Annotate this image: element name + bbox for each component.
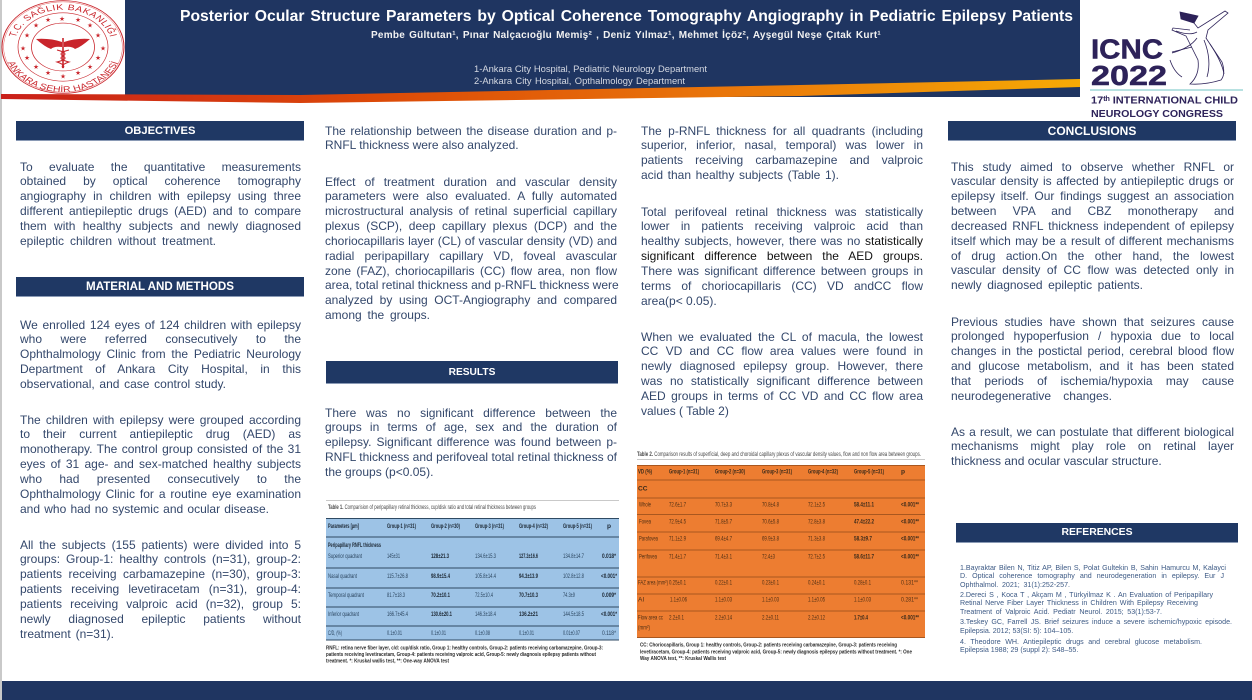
text: perifoveal thickness: area(p< 0.05). [641,294,717,308]
text: previous studies: neurodegenerative changes. [951,389,1112,403]
table 1: peripapillary thickness: C/D, (%) [328,630,342,637]
logo: hospital seal: ★ [45,16,51,24]
text: objectives body: angiography in children with epilepsy using three [20,189,301,203]
text: treatment duration: plexus (SCP), deep capillary plexus (DCP) and the [325,219,617,233]
table 1: peripapillary thickness: 134.6±15.3 [475,553,496,560]
text: reference 3: Epilepsia. 2012; 53(SI: 5): 104–105. [960,626,1073,634]
text: result statement [951,424,1234,468]
table 1: peripapillary thickness: 70.7±10.3 [519,592,538,599]
table 2: vascular density: 2.2±0.1 [669,614,684,622]
table 1: peripapillary thickness: 0.01±0.07 [563,630,580,637]
table 2: vascular density: 2.2±0.12 [808,614,825,622]
table 2: vascular density: 0.131** [901,580,918,586]
text: conclusions study aim: decreased RNFL thickness independent of epilepsy [951,219,1234,233]
logo: hospital seal: ★ [33,22,39,30]
table 2: vascular density: 0.28±0.1 [854,580,871,586]
table 2: vascular density: 71.4±3.1 [715,554,732,560]
text: reference 4: 4. Theodore WH. Antiepileptic drugs and cerebral glucose metabolism. [960,638,1202,646]
table 2: vascular density: 72.4±3 [762,554,775,560]
text: reference 1 [960,564,1226,588]
table 2: vascular density: 58.6±11.7 [854,554,874,560]
text: conclusions study aim: This study aimed to observe whether RNFL or [951,160,1234,174]
text: result statement: mechanisms might play role on retinal layer [951,439,1234,453]
table 2: vascular density: <0.001** [901,518,919,526]
logo: hospital seal: ★ [59,15,65,23]
text: macula findings: CC VD and CC flow area values were found in [641,344,923,358]
text: results intro: epilepsy. Significant difference was found between p- [325,435,617,449]
logo: hospital seal: ★ [20,44,26,52]
table 2: vascular density: 72.8±3.8 [808,518,825,526]
text: results intro: groups in terms of age, sex and the duration of [325,420,617,434]
table 2: vascular density: (mm²) [638,624,650,632]
table 2: vascular density: p [901,468,905,476]
title: Posterior Ocular Structure Parameters by Optical Coherence Tomography Angiography in Pediatric Epilepsy Patients [180,8,1073,25]
table 1: peripapillary thickness: Peripapillary RNFL thickness [328,542,381,549]
text: p-RNFL quadrants [641,124,923,182]
text: reference 2: 2.Dereci S , Koca T , Akçam M , Türkyilmaz K . An Evaluation of Peripapillary [960,590,1213,598]
table 1: peripapillary thickness: 105.8±14.4 [475,573,496,580]
table 2: vascular density: Group-2 (n=30) [715,468,745,476]
text: macula findings: When we evaluated the CL of macula, the lowest [641,330,923,344]
table 1: peripapillary thickness: 136.2±21 [519,611,538,618]
table 1: peripapillary thickness: 72.5±10.4 [475,592,493,599]
table 2: vascular density: <0.001** [901,502,919,508]
text: treatment duration: radial peripapillary capillary VD, foveal avascular [325,249,617,263]
text: grouping: The children with epilepsy were grouped according [20,412,301,426]
table 2: vascular density: 72.1±2.5 [808,502,825,508]
logo: hospital seal: ★ [87,63,93,71]
table 1: peripapillary thickness: 102.8±12.8 [563,573,584,580]
table 2: vascular density: Group-4 (n=32) [808,468,838,476]
text: conclusions study aim [951,160,1234,292]
table 1: peripapillary thickness: 134.8±14.7 [563,553,584,560]
header band [125,0,1080,97]
table 2: vascular density: 58.4±11.1 [854,502,874,508]
text: macula findings: was no statistically significant difference between [641,374,923,388]
text: treatment duration: among the groups. [325,308,430,322]
text: five groups: groups: Group-1: healthy controls (n=31), group-2: [20,552,301,566]
table 2: vascular density: 70.6±5.8 [762,518,779,526]
table 2: vascular density: Flow area cc [638,614,663,622]
text: reference 1: 1.Bayraktar Bilen N, Titiz AP, Bilen S, Polat Gultekin B, Sahin Hamurcu M, Kalayci [960,564,1226,572]
text: previous studies: and glucose metabolism, and it has been stated [951,359,1234,373]
text: results intro: RNFL thickness and perifoveal total retinal thickness of [325,450,617,464]
table 2: vascular density: 0.24±0.1 [808,580,825,586]
text: five groups: All the subjects (155 patients) were divided into 5 [20,538,301,552]
text: conclusions study aim: newly diagnosed epileptic patients. [951,278,1143,292]
table 2: vascular density: 0.22±0.1 [715,580,732,586]
text: previous studies: Previous studies have shown that seizures cause [951,314,1234,328]
panel: objectives [16,121,304,248]
text: reference 4 [960,638,1202,654]
footer band [2,681,1252,700]
table 1: peripapillary thickness: Superior quadrant [328,553,362,560]
table 1: peripapillary thickness: Parameters [µm] [328,523,359,530]
table 2: vascular density: CC [638,486,648,492]
table 2: vascular density: Whole [639,502,651,508]
text: grouping: monotherapy. The control group consisted of the 31 [20,442,301,456]
text: conclusions study aim: epilepsy itself. Our findings suggest an association [951,189,1234,203]
text: conclusions study aim: between VPA and CBZ monotherapy and [951,204,1234,218]
logo: hospital seal: ★ [24,32,30,40]
logo: ICNC 2022 congress: 17ᵗʰ INTERNATIONAL CHILD [1091,94,1239,106]
text: perifoveal thickness: terms of choriocapillaris (CC) VD andCC flow [641,279,923,293]
text: conclusions study aim: vascular density is affected by antiepileptic drugs or [951,174,1234,188]
table 2: vascular density: Group-1 (n=31) [669,468,699,476]
text: macula findings: values ( Table 2) [641,404,729,418]
text: reference 3: 3.Teskey GC, Farrell JS. Brief seizures induce a severe ischemic/hypoxic episode. [960,618,1232,626]
table 1: peripapillary thickness: 0.1±0.01 [519,630,534,637]
text: treatment duration: parameters were also evaluated. A fully automated [325,189,617,203]
text: objectives body: them with healthy subjects and newly diagnosed [20,219,301,233]
table 2: vascular density: 1.1±0.03 [762,596,779,604]
affiliations: 2-Ankara City Hospital, Opthalmology Department [474,75,685,86]
table 1: peripapillary thickness: 166.7±45.4 [387,611,408,618]
text: conclusions study aim: vascular density of CC flow was detected only in [951,263,1234,277]
left edge strip [0,0,2,700]
table 1: peripapillary thickness: Nasal quadrant [328,573,357,580]
table 1: peripapillary thickness: 127.3±16.6 [519,553,538,560]
table 1: peripapillary thickness: p [607,523,611,530]
heading: material and methods: MATERIAL AND METHODS [86,280,234,293]
heading: results: RESULTS [449,366,495,378]
text: enrolment: Ophthalmology Clinic from the Pediatric Neurology [20,347,301,361]
text: grouping: Ophthalmology Clinic for a routine eye examination [20,487,301,501]
text: objectives body: different antiepileptic drugs (AED) and to compare [20,204,301,218]
text: perifoveal thickness: healthy subjects, however, there was no statistically [641,234,923,248]
table 1: peripapillary thickness: 144.5±18.5 [563,611,584,618]
text: grouping: to their current antiepileptic drug (AED) as [20,427,301,441]
table 1: peripapillary thickness: 0.1±0.01 [431,630,446,637]
logo: hospital seal: ★ [24,54,30,62]
table 2: vascular density: 2.2±0.11 [762,614,779,622]
table 1: peripapillary thickness: Group-2 (n=30) [431,523,460,530]
heading: objectives: OBJECTIVES [125,124,195,136]
text: perifoveal thickness: significant difference between the AED groups. [641,249,923,263]
table 1: peripapillary thickness: 130.6±20.1 [431,611,452,618]
text: disease duration: RNFL thickness were also analyzed. [325,138,519,152]
text: enrolment: observational, and case control study. [20,377,226,391]
table 1: peripapillary thickness: 0.1±0.01 [387,630,402,637]
text: macula findings [641,330,924,418]
table 1: peripapillary thickness: 0.1±0.08 [475,630,490,637]
table 1: peripapillary thickness: <0.001* [601,611,617,618]
table 2: vascular density: 72.7±2.5 [808,554,825,560]
table 2: vascular density: 72.9±4.5 [669,518,686,526]
table 1: peripapillary thickness: Inferior quadrant [328,611,359,618]
text: treatment duration: choriocapillaris layer (CL) of vascular density (VD) and [325,234,617,248]
table 2: vascular density: 58.3±9.7 [854,536,872,542]
logo: ICNC 2022 congress: NEUROLOGY CONGRESS [1091,109,1223,120]
logo: ICNC 2022 congress: ICNC [1091,34,1163,64]
table 1: peripapillary thickness: 70.2±10.1 [431,592,450,599]
logo: hospital seal: ★ [45,69,51,77]
logo: ICNC 2022 congress: 2022 [1091,60,1167,91]
table 1: peripapillary thickness: Group-4 (n=32) [519,523,548,530]
table 2: vascular density: Parafovea [639,536,658,542]
table 2: vascular density: 1.1±0.06 [670,596,687,604]
heading: conclusions: CONCLUSIONS [1048,124,1136,138]
logo: hospital seal: ★ [75,16,81,24]
table 2: vascular density: Way ANOVA test, **: Kruskal Wallis test [640,656,726,662]
text: reference 2: Retinal Nerve Fiber Layer Thickness in Children With Epilepsy Receiving [960,599,1198,607]
logo: hospital seal: ★ [100,44,106,52]
table 1: peripapillary thickness: 98.9±15.4 [431,573,450,580]
affiliations: 1-Ankara City Hospital, Pediatric Neurology Department [474,63,707,74]
table 1: peripapillary thickness: 0.009* [602,592,616,599]
table 1: peripapillary thickness: 0.018* [602,553,616,560]
table 2: vascular density: <0.001** [901,554,919,560]
text: enrolment: We enrolled 124 eyes of 124 children with epilepsy [20,318,301,332]
text: conclusions study aim: of drug action.On the other hand, the lowest [951,249,1234,263]
table 2: vascular density: 2.2±0.14 [715,614,732,622]
table 2: vascular density: FAZ area (mm²) [638,580,668,586]
text: objectives body: epileptic children without treatment. [20,234,216,248]
table 2: vascular density: 69.9±3.8 [762,536,779,542]
text: perifoveal thickness [641,204,923,308]
table 2: vascular density: <0.001** [901,614,919,622]
text: five groups: patients receiving valproic acid (n=32), group 5: [20,597,301,611]
table 1: peripapillary thickness: 145±31 [387,553,400,560]
text: perifoveal thickness: Total perifoveal retinal thickness was statistically [641,204,923,218]
table 2: vascular density: 1.1±0.03 [854,596,871,604]
table 1: peripapillary thickness: 94.3±13.9 [519,573,538,580]
table 1: peripapillary thickness: Group-5 (n=31) [563,523,592,530]
text: treatment duration: Effect of treatment duration and vascular density [325,174,617,188]
panel: material and methods [16,277,304,641]
text: previous studies [951,314,1234,403]
table 1: peripapillary thickness: 115.7±26.8 [387,573,408,580]
table 1: peripapillary thickness: 128±21.3 [431,553,449,560]
table 2: vascular density: 1.1±0.03 [715,596,732,604]
logo: hospital seal: T.C. SAĞLIK BAKANLIĞI [8,4,117,36]
text: conclusions study aim: itself which may be a result of different mechanisms [951,234,1234,248]
table 2: vascular density: VD (%) [638,468,652,476]
text: objectives body [20,160,301,248]
logo: hospital seal [2,0,124,94]
text: result statement: thickness and ocular vascular structure. [951,454,1162,468]
table 1: peripapillary thickness: Table 1. Comparision of peripapillary retinal thickness, cup/disk ratio and total retinal thickness between groups [328,504,536,511]
heading: material and methods [16,277,304,297]
text: reference 2 [960,590,1213,616]
table 2: vascular density: 0.281** [901,596,918,604]
table 1: peripapillary thickness: 74.3±9 [563,592,575,599]
text: grouping: eyes of 31 age- and sex-matched healthy subjects [20,457,301,471]
table 2: vascular density: 71.3±3.8 [808,536,825,542]
text: treatment duration: microstructural analysis of retinal superficial capillary [325,204,617,218]
table 2: vascular density: Group-3 (n=31) [762,468,792,476]
text: treatment duration [325,174,619,322]
text: treatment duration: zone (FAZ), choriocapillaris (CC) flow area, non flow [325,264,617,278]
panel: conclusions [948,121,1236,468]
text: reference 4: Epilepsia 1988; 29 (suppl 2): S48–55. [960,646,1078,654]
table 2: vascular density: Perifovea [639,554,657,560]
text: enrolment [20,318,301,391]
table 1: peripapillary thickness [326,500,619,664]
text: treatment duration: area, total retinal thickness and p-RNFL thickness were [325,278,619,292]
text: results intro [325,406,617,479]
table 2: vascular density [637,451,925,662]
text: perifoveal thickness: There was significant difference between groups in [641,264,923,278]
text: disease duration [325,124,617,152]
text: previous studies: changes in the postictal period, cerebral blood flow [951,344,1234,358]
heading: conclusions [948,121,1236,141]
heading: objectives [16,121,304,141]
table 2: vascular density: 71.8±5.7 [715,518,732,526]
text: result statement: As a result, we can postulate that different biological [951,424,1234,438]
table 2: vascular density: 70.8±4.8 [762,502,779,508]
text: grouping: who had presented consecutively to the [20,472,301,486]
text: five groups [20,538,301,641]
table 1: peripapillary thickness: 0.118* [602,630,616,637]
logo: hospital seal: ANKARA ŞEHİR HASTANESİ [8,60,118,92]
table 2: vascular density: AI [638,596,644,604]
table 1: peripapillary thickness: Temporal quadrant [328,592,364,599]
table 1: peripapillary thickness: treatment. *: Kruskal wallis test, **: One-way ANOVA test [326,658,449,664]
text: five groups: treatment (n=31). [20,627,114,641]
text: perifoveal thickness: lower in patients receiving valproic acid than [641,219,923,233]
table 1: peripapillary thickness: 81.7±18.3 [387,592,405,599]
table 1: peripapillary thickness: Group-3 (n=31) [475,523,504,530]
affiliations [474,63,707,86]
text: p-RNFL quadrants: acid than healthy subjects (Table 1). [641,168,839,182]
text: grouping [20,412,301,516]
table 1: peripapillary thickness: Group-1 (n=31) [387,523,416,530]
heading: results [326,361,618,384]
logo: hospital seal: ★ [95,32,101,40]
table 2: vascular density: <0.001** [901,536,919,542]
text: macula findings: AED groups in terms of CC VD and CC flow area [641,389,923,403]
text: results intro: the groups (p<0.05). [325,465,433,479]
logo: hospital seal: ★ [87,22,93,30]
table 1: peripapillary thickness: <0.001* [601,573,617,580]
logo: hospital seal: ★ [95,54,101,62]
table 2: vascular density: 71.4±1.7 [669,554,686,560]
text: previous studies: prolonged hypoperfusion / hypoxia due to local [951,329,1234,343]
table 2: vascular density: 47.4±22.2 [854,518,874,526]
heading: references: REFERENCES [1061,527,1132,538]
text: previous studies: that periods of ischemia/hypoxia may cause [951,374,1234,388]
header swoosh [1,79,1080,103]
table 2: vascular density: Fovea [639,518,651,526]
text: objectives body: obtained by optical coherence tomography [20,174,301,188]
text: enrolment: Department of Ankara City Hospital, in this [20,362,301,376]
table 2: vascular density: 1.7±0.4 [854,614,868,622]
text: five groups: patients receiving levetiracetam (n=31), group-4: [20,582,301,596]
heading: references [956,523,1238,543]
table 2: vascular density: 71.1±2.9 [669,536,686,542]
table 2: vascular density: 0.23±0.1 [762,580,779,586]
text: reference 1: D. Optical coherence tomography and neurodegeneration in epilepsy. Eur J [960,572,1224,580]
table 2: vascular density: 1.1±0.05 [808,596,825,604]
table 2: vascular density: Group-5 (n=31) [854,468,884,476]
logo: hospital seal: ★ [33,63,39,71]
table 2: vascular density: 72.6±1.7 [669,502,686,508]
text: results intro: There was no significant difference between the [325,406,617,420]
text: p-RNFL quadrants: patients receiving carbamazepine and valproic [641,153,923,167]
authors: Pembe Gültutan¹, Pınar Nalçacıoğlu Memiş² , Deniz Yılmaz¹, Mehmet İçöz², Ayşegül Neşe Çıtak Kurt¹ [371,30,881,41]
text: p-RNFL quadrants: superior, inferior, nasal, temporal) was lower in [641,138,923,152]
table 2: vascular density: 69.4±4.7 [715,536,732,542]
text: reference 1: Ophthalmol. 2021; 31(1):252-257. [960,580,1070,588]
table 2: vascular density: 70.7±3.3 [715,502,732,508]
text: p-RNFL quadrants: The p-RNFL thickness for all quadrants (including [641,124,923,138]
text: treatment duration: analyzed by using OCT-Angiography and compared [325,293,617,307]
logo: hospital seal: ★ [75,69,81,77]
table 1: peripapillary thickness: 146.3±18.4 [475,611,496,618]
text: disease duration: The relationship between the disease duration and p- [325,124,617,138]
text: macula findings: newly diagnosed epilepsy group. However, there [641,359,923,373]
logo: ICNC 2022 congress [1090,10,1243,120]
logo: hospital seal: ★ [60,72,66,80]
text: objectives body: To evaluate the quantitative measurements [20,160,301,174]
text: grouping: and who had no systemic and ocular disease. [20,502,269,516]
text: enrolment: who were referred consecutively to the [20,332,301,346]
text: reference 3 [960,618,1232,634]
table 2: vascular density: 0.25±0.1 [669,580,686,586]
text: reference 2: Treatment of Valproic Acid. Pediatr Neurol. 2015; 53(1):53-7. [960,608,1162,616]
text: five groups: newly diagnosed epileptic patients without [20,612,301,626]
text: five groups: patients receiving carbamazepine (n=30), group-3: [20,567,301,581]
